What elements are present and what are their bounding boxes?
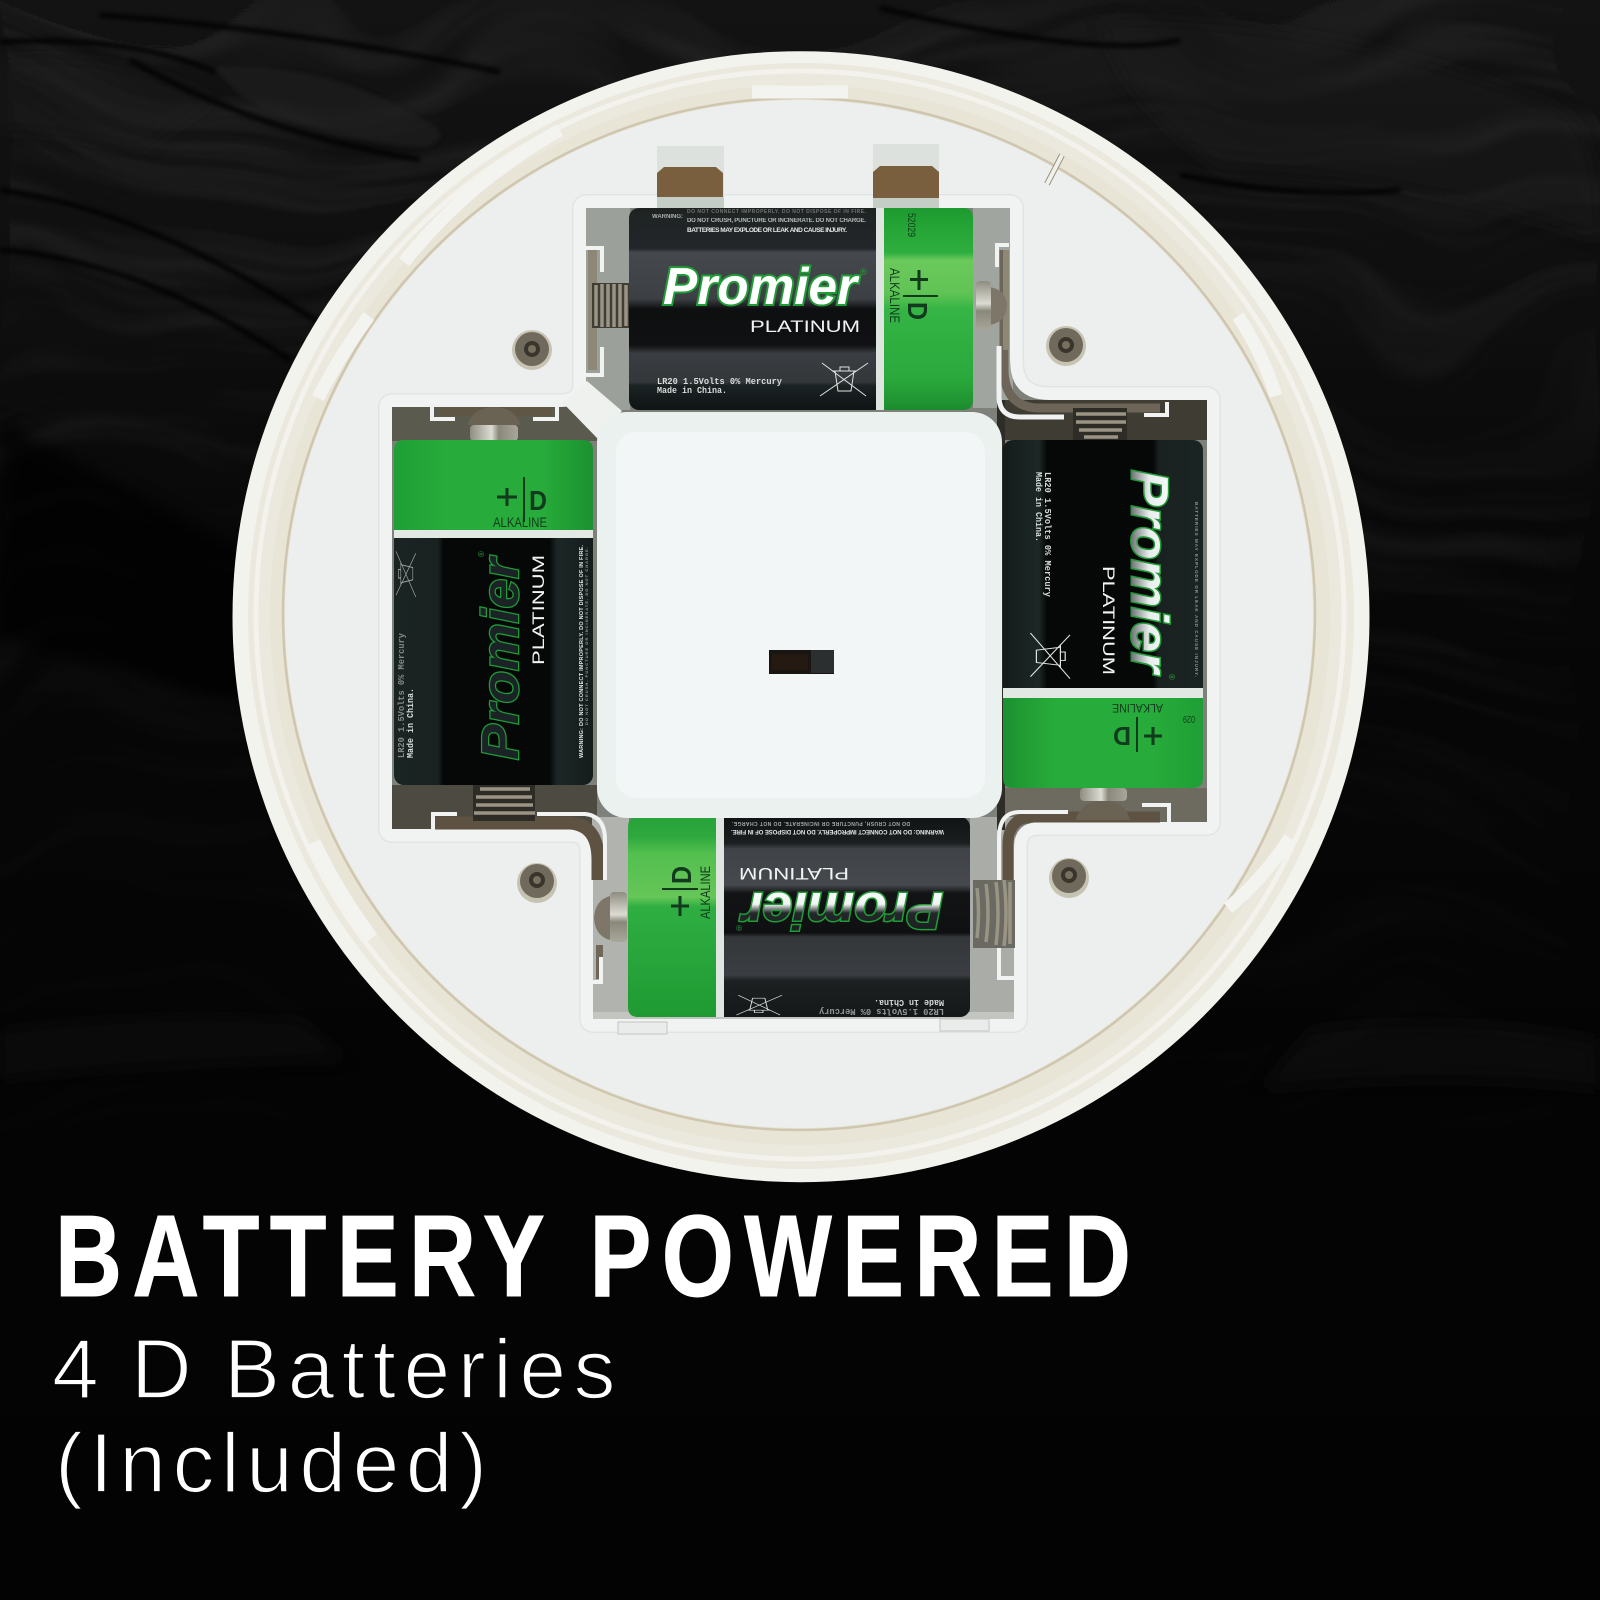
- cream ring: [248, 63, 1354, 1169]
- icon: crossed-out bin: [736, 995, 782, 1015]
- size marking: ALKALINE: [493, 514, 547, 530]
- top contact tabs: [657, 144, 939, 208]
- springs: [473, 283, 1127, 948]
- switch slot: [769, 650, 834, 674]
- product line: PLATINUM: [1099, 566, 1118, 675]
- warning text: BATTERIES MAY EXPLODE OR LEAK AND CAUSE INJURY.: [687, 227, 847, 234]
- logo: Promier: [1120, 470, 1178, 676]
- subheading line 2: (Included): [55, 1416, 487, 1510]
- positive nubs: [990, 287, 1007, 325]
- center cover: [597, 412, 1002, 818]
- specs: [818, 997, 944, 1016]
- warning text: DO NOT CONNECT IMPROPERLY. DO NOT DISPOSE OF IN FIRE.: [687, 209, 867, 215]
- icon: crossed-out bin: [820, 363, 868, 396]
- specs: [397, 632, 416, 758]
- warning text: DO NOT CRUSH, PUNCTURE OR INCINERATE. DO NOT CHARGE.: [584, 547, 589, 725]
- screw: bottom left: [517, 863, 557, 903]
- screw: top left: [512, 330, 552, 370]
- size marking: [1112, 701, 1195, 752]
- size marking: [493, 477, 547, 530]
- specs: Made in China.: [406, 688, 416, 758]
- size marking: D: [902, 302, 933, 320]
- specs: Made in China.: [657, 386, 727, 396]
- logo: Promier: [472, 555, 530, 760]
- warning text: [579, 545, 589, 758]
- outer rim: [232, 51, 1370, 1182]
- specs: LR20 1.5Volts 0% Mercury: [657, 377, 783, 387]
- battery: left: [394, 440, 593, 785]
- screw: top right: [1046, 326, 1086, 366]
- specs: [657, 377, 783, 396]
- subheading line 1: 4 D Batteries: [52, 1322, 623, 1416]
- battery: top: ®: [860, 267, 867, 277]
- battery: left: ®: [477, 551, 486, 557]
- product line: PLATINUM: [739, 864, 849, 883]
- bottom clip tabs: [618, 1019, 989, 1034]
- warning text: [652, 209, 867, 234]
- diagonal rib: [562, 381, 622, 438]
- warning text: WARNING: DO NOT CONNECT IMPROPERLY. DO NOT DISPOSE OF IN FIRE.: [731, 828, 944, 834]
- warning text: [731, 820, 944, 834]
- battery: bottom: [628, 817, 970, 1017]
- size marking: [887, 213, 938, 323]
- warning text: BATTERIES MAY EXPLODE OR LEAK AND CAUSE INJURY.: [1194, 502, 1199, 677]
- product line: PLATINUM: [529, 555, 548, 665]
- warning text: WARNING:: [652, 214, 683, 220]
- background: dark painted texture: [0, 0, 1600, 1062]
- battery: right: ®: [1167, 674, 1176, 680]
- battery: bottom: ®: [736, 923, 742, 932]
- product line: PLATINUM: [750, 317, 860, 336]
- size marking: ALKALINE: [697, 866, 713, 919]
- logo: Promier: [739, 881, 943, 939]
- specs: Made in China.: [874, 997, 944, 1007]
- logo: Promier: [663, 258, 860, 316]
- heading: BATTERY POWERED: [55, 1192, 1141, 1321]
- icon: crossed-out bin: [1030, 633, 1070, 679]
- warning text: DO NOT CRUSH, PUNCTURE OR INCINERATE. DO NOT CHARGE.: [687, 218, 866, 224]
- specs: LR20 1.5Volts 0% Mercury: [397, 632, 407, 758]
- specs: LR20 1.5Volts 0% Mercury: [1042, 472, 1052, 598]
- warning text: WARNING: DO NOT CONNECT IMPROPERLY. DO NOT DISPOSE OF IN FIRE.: [579, 545, 585, 758]
- battery compartment recess: [392, 208, 1208, 1020]
- ring clips: [314, 92, 1290, 938]
- white retaining clips: [432, 245, 1169, 982]
- icon: crossed-out bin: [396, 551, 416, 597]
- size marking: D: [1113, 721, 1131, 751]
- metal contacts and springs: [432, 245, 1169, 982]
- device: round white housing: [232, 51, 1370, 1182]
- specs: Made in China.: [1033, 472, 1043, 542]
- size marking: D: [666, 866, 697, 884]
- specs: [1033, 472, 1052, 598]
- battery: top: [629, 208, 973, 410]
- size marking: 52029: [905, 213, 917, 237]
- corner metal strips: [1004, 250, 1160, 408]
- size marking: D: [529, 485, 547, 516]
- size marking: [662, 866, 713, 919]
- size marking: 029: [1183, 713, 1195, 724]
- warning text: DO NOT CRUSH, PUNCTURE OR INCINERATE. DO NOT CHARGE.: [731, 820, 910, 826]
- size marking: ALKALINE: [1112, 701, 1163, 715]
- back plate: [285, 100, 1313, 1128]
- notch: [1047, 155, 1062, 184]
- specs: LR20 1.5Volts 0% Mercury: [818, 1006, 944, 1016]
- battery: right: [1003, 440, 1203, 788]
- screw: bottom right: [1049, 858, 1089, 898]
- screws: [512, 326, 1089, 903]
- size marking: ALKALINE: [887, 268, 903, 323]
